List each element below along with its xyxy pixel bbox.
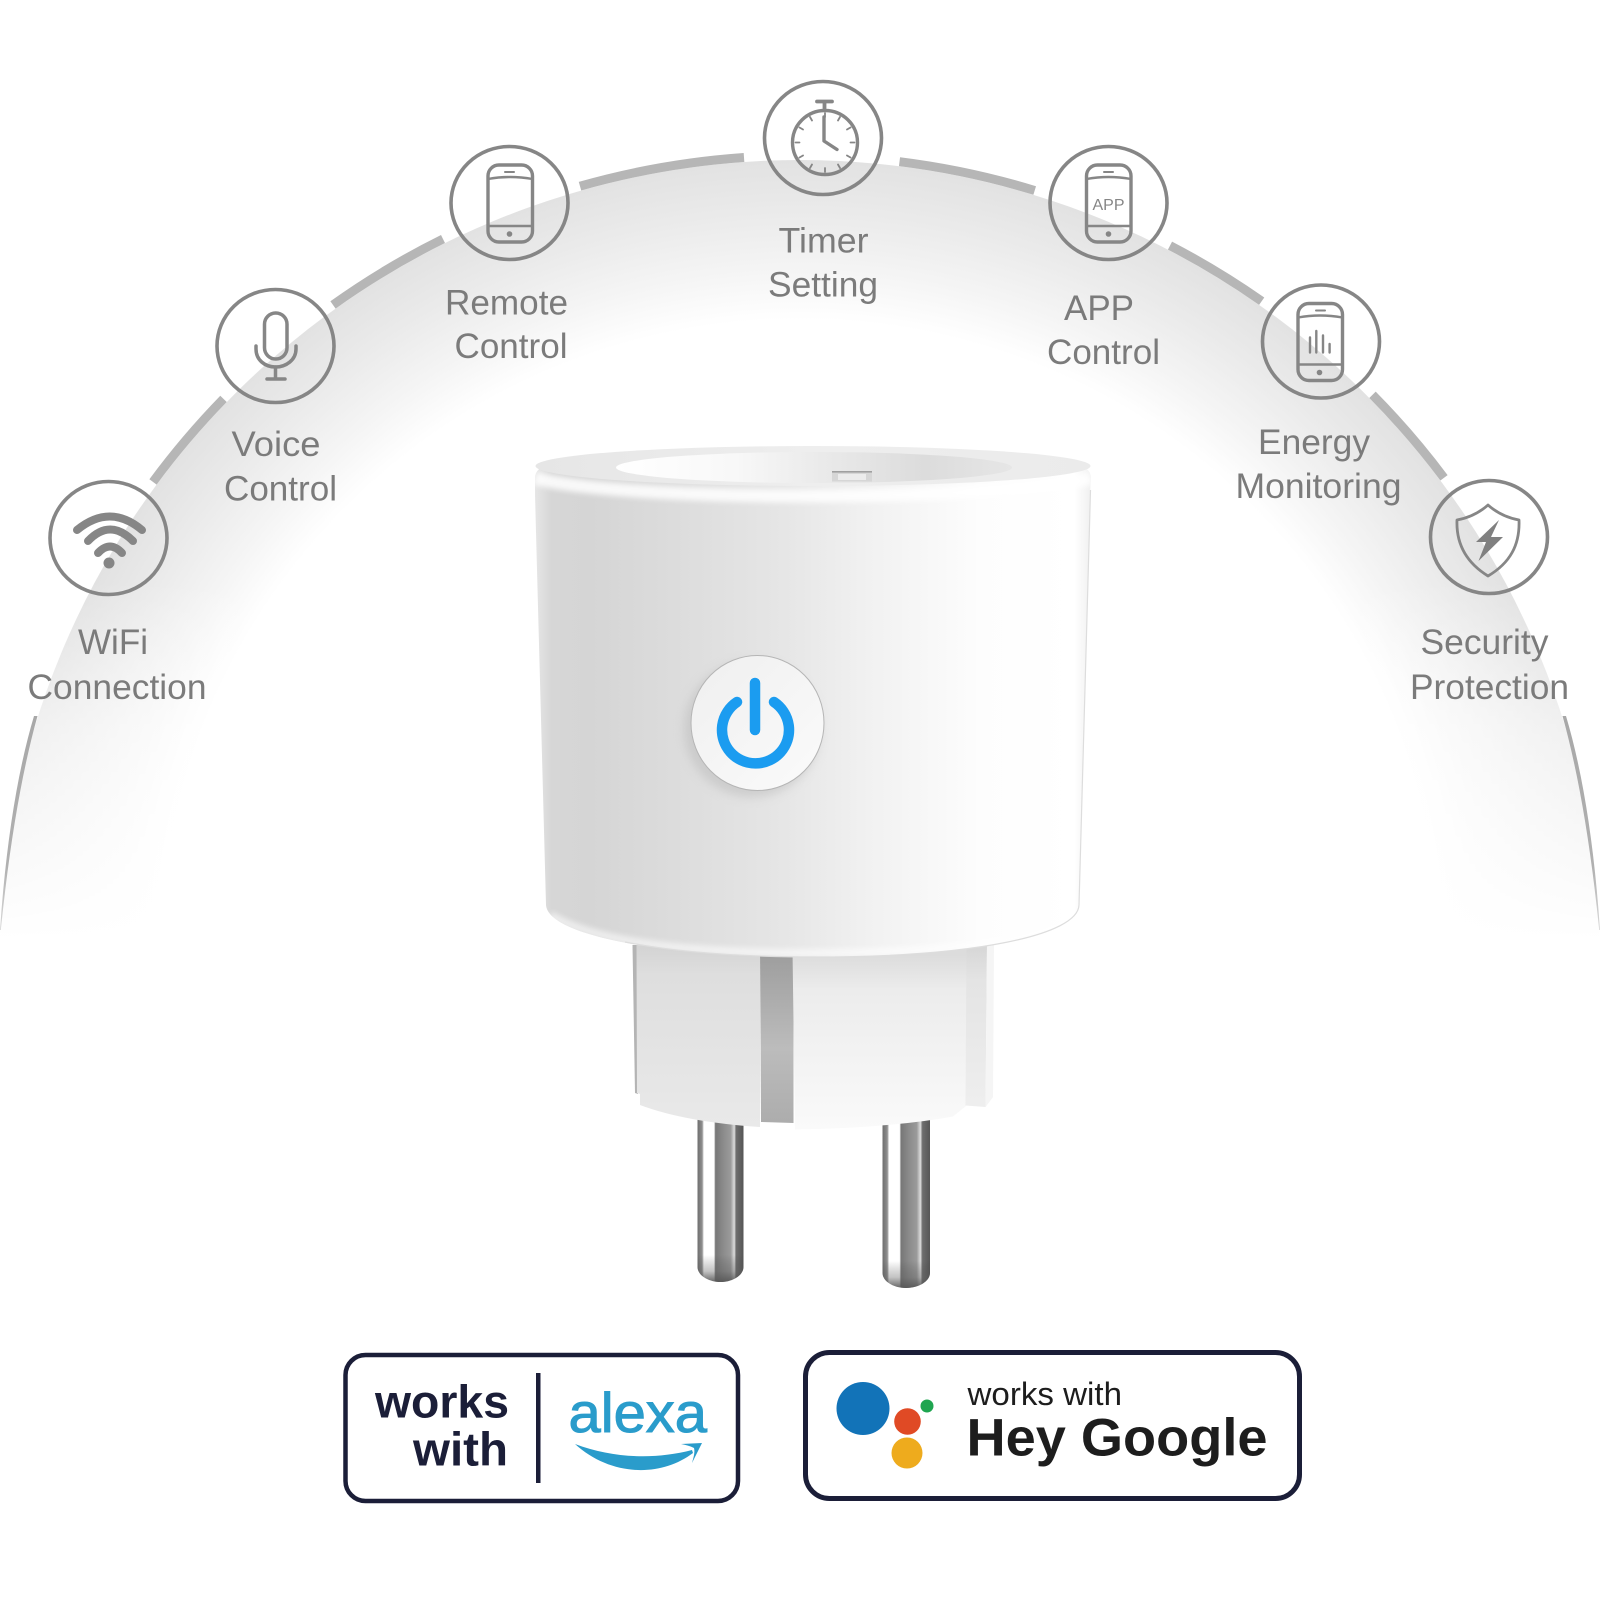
label: Remote Control: Control xyxy=(454,327,568,366)
socket recess xyxy=(616,452,1012,483)
icon: microphone xyxy=(256,313,296,379)
label: Security Protection xyxy=(1410,623,1569,707)
right strip xyxy=(966,945,987,1107)
icon: smartphone xyxy=(488,165,532,242)
plug base xyxy=(632,945,994,1130)
label: Voice Control: Voice xyxy=(232,425,320,464)
feature: Security Protection xyxy=(1410,480,1569,707)
feature: Timer Setting xyxy=(764,82,882,304)
pin: left xyxy=(698,1110,744,1282)
centre groove xyxy=(760,950,794,1123)
socket rim xyxy=(536,446,1090,486)
label: Timer Setting xyxy=(768,222,878,304)
feature: Energy Monitoring xyxy=(1236,285,1402,506)
label: Security Protection: Protection xyxy=(1410,668,1569,707)
label: Timer Setting: Setting xyxy=(768,266,878,304)
label: WiFi Connection: Connection xyxy=(28,668,206,707)
label: Timer Setting: Timer xyxy=(778,222,869,260)
label: Energy Monitoring xyxy=(1236,423,1402,506)
google assistant dots xyxy=(836,1382,934,1468)
label: Security Protection: Security xyxy=(1420,623,1549,662)
label: APP Control: Control xyxy=(1047,333,1160,372)
works with text: with xyxy=(412,1422,508,1476)
pin: right xyxy=(882,1110,930,1288)
alexa logo xyxy=(568,1381,708,1470)
alexa logo: alexa xyxy=(568,1381,708,1444)
icon: phone with APP: APP xyxy=(1092,197,1125,214)
divider xyxy=(536,1373,540,1483)
icon: stopwatch xyxy=(792,102,858,174)
plug body xyxy=(535,446,1091,957)
dashed arc xyxy=(0,158,1600,930)
badge: works with alexa xyxy=(346,1355,738,1501)
label: APP Control: APP xyxy=(1064,289,1134,328)
feature: APP Control xyxy=(1047,146,1167,372)
far-left edge strip xyxy=(632,945,638,1094)
works with text xyxy=(374,1376,509,1476)
feature: Voice Control xyxy=(217,290,337,508)
label: WiFi Connection: WiFi xyxy=(78,623,148,662)
power button xyxy=(684,656,824,797)
label: WiFi Connection xyxy=(28,623,206,707)
label: APP Control xyxy=(1047,289,1160,372)
icon: shield with bolt xyxy=(1457,505,1519,576)
label: Remote Control xyxy=(445,284,568,366)
label: Voice Control xyxy=(224,425,337,508)
icon: power symbol xyxy=(722,683,789,763)
earth contact xyxy=(832,471,872,482)
feature: WiFi Connection xyxy=(28,482,206,707)
label: Voice Control: Control xyxy=(224,470,337,508)
icon: wifi xyxy=(77,516,142,568)
works with text: works xyxy=(374,1376,509,1428)
works with text: works with xyxy=(966,1376,1122,1412)
left face xyxy=(636,945,760,1127)
product: smart plug xyxy=(535,446,1091,1288)
label: Energy Monitoring: Energy xyxy=(1258,423,1370,462)
body edge line xyxy=(625,490,1090,957)
label: Remote Control: Remote xyxy=(445,284,568,322)
icon: phone with APP xyxy=(1086,165,1131,242)
right face xyxy=(792,945,967,1130)
background dome xyxy=(0,160,1600,961)
Hey Google text: Hey Google xyxy=(966,1408,1268,1468)
label: Energy Monitoring: Monitoring xyxy=(1236,467,1402,506)
badge: works with Hey Google xyxy=(806,1352,1300,1498)
feature: Remote Control xyxy=(445,146,568,366)
icon: phone with energy bars xyxy=(1298,304,1342,380)
